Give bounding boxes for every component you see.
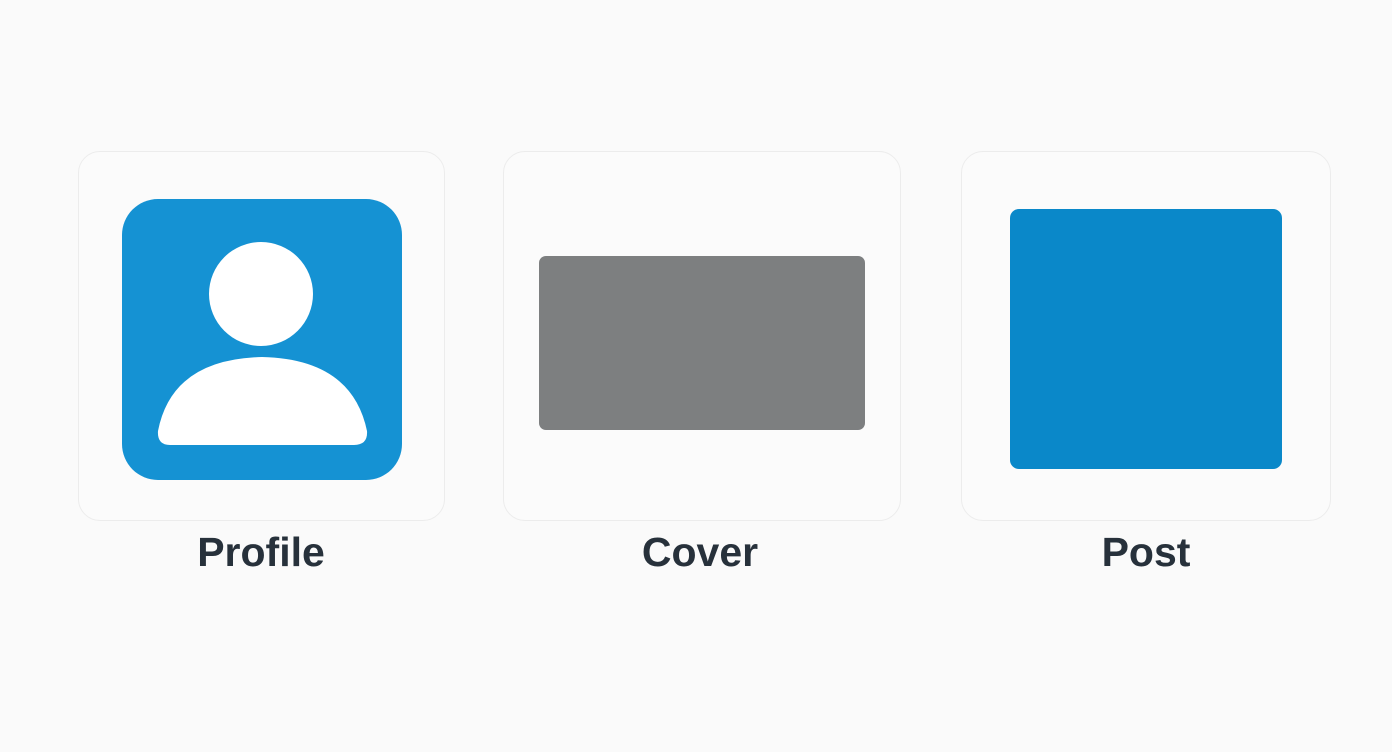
icon: profile avatar — [122, 199, 402, 480]
heading: Profile: Profile — [197, 529, 325, 575]
icon: post square — [1010, 209, 1282, 469]
heading: Cover: Cover — [642, 529, 758, 575]
panel: cover — [503, 151, 901, 521]
panel: profile — [78, 151, 445, 521]
panel: post — [961, 151, 1331, 521]
heading: Post: Post — [1102, 529, 1190, 575]
icon: cover rectangle — [539, 256, 865, 430]
